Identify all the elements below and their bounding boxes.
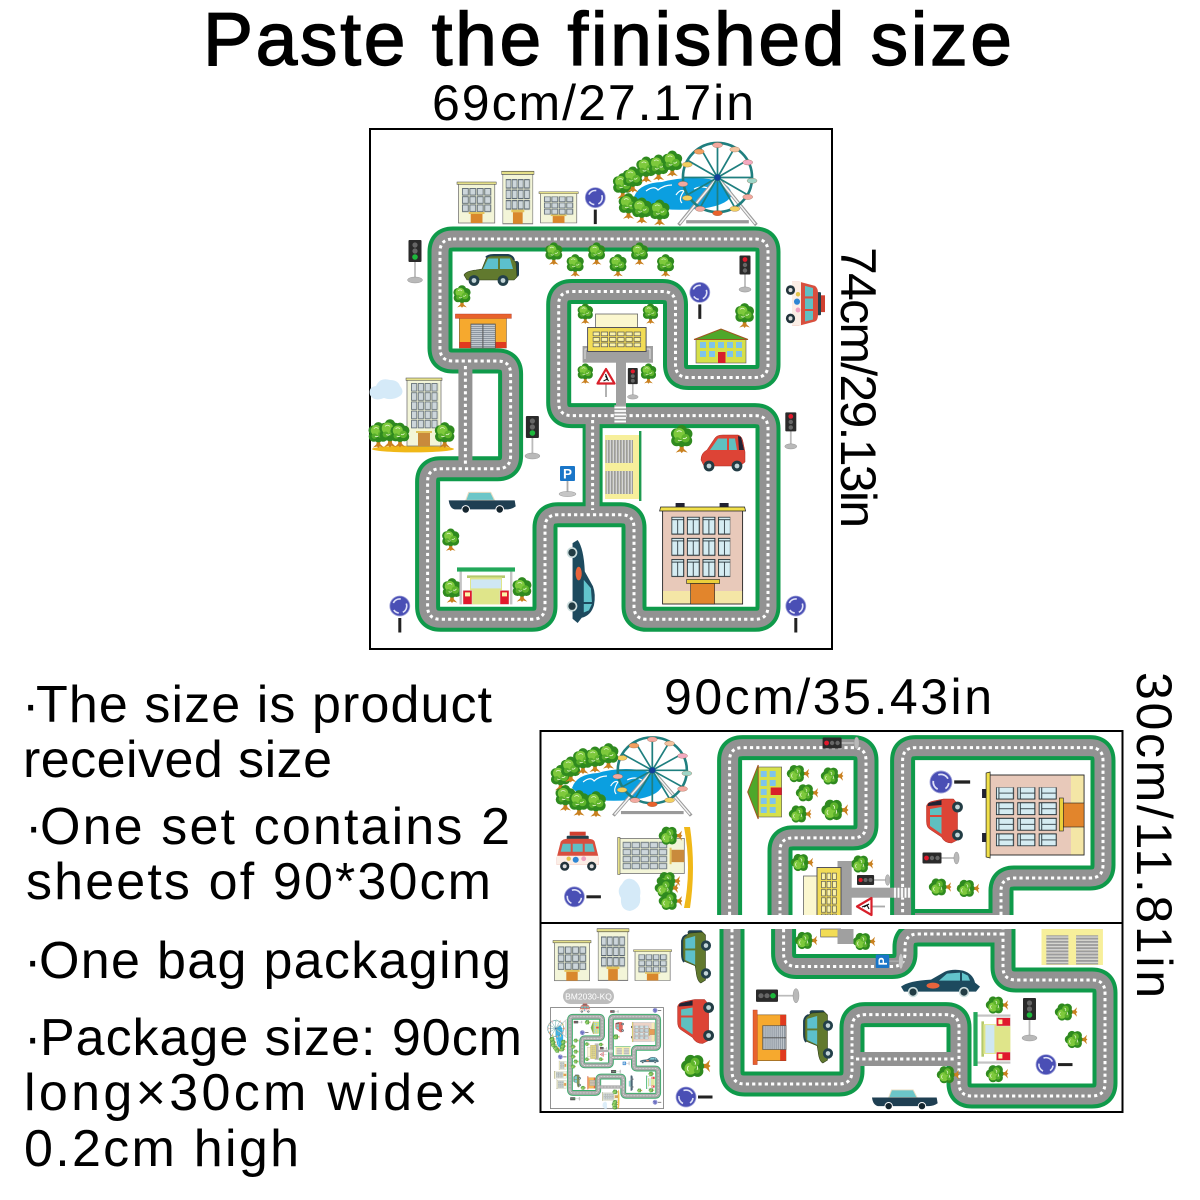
jeep bbox=[464, 255, 519, 286]
three cream buildings bbox=[457, 171, 578, 224]
layout thumbnail bbox=[548, 1004, 664, 1110]
crossing sign bbox=[857, 898, 885, 915]
house bbox=[694, 329, 748, 363]
van bbox=[557, 832, 599, 871]
cloud bbox=[619, 879, 640, 911]
sports car bbox=[901, 970, 980, 996]
note 3: · bbox=[24, 932, 41, 990]
height label: top sheet: 74cm/29.13in bbox=[830, 247, 886, 528]
sideways cars bbox=[678, 930, 833, 1063]
sideways traffic lights bbox=[756, 989, 799, 1003]
trees inside the loop bbox=[442, 242, 754, 603]
traffic lights bbox=[408, 240, 797, 459]
round signs bbox=[564, 771, 970, 907]
dark sedan bbox=[449, 492, 516, 513]
tree cluster by the lake bbox=[613, 150, 682, 225]
cloud bbox=[370, 379, 402, 399]
sideways house bbox=[748, 765, 782, 819]
note 2: · bbox=[25, 798, 42, 856]
center building with plaza bbox=[583, 314, 653, 423]
model code label bbox=[563, 988, 614, 1004]
sideways orange garage bbox=[753, 1010, 786, 1065]
sheet 2 roads bbox=[732, 929, 1105, 1096]
note 3: One bag packaging bbox=[39, 932, 511, 990]
sideways red car bbox=[926, 799, 963, 843]
parking sign bbox=[559, 466, 576, 497]
sideways large building bbox=[982, 772, 1084, 858]
ferris wheel bbox=[678, 143, 757, 225]
note 1: The size is product bbox=[36, 676, 493, 734]
orange garage bbox=[455, 314, 511, 348]
lake bbox=[634, 178, 732, 210]
round signs bbox=[676, 1055, 1072, 1107]
sideways yellow garage, cut at sheet edge bbox=[1042, 929, 1103, 965]
gas station bbox=[457, 567, 515, 604]
traffic lights bbox=[823, 737, 959, 885]
assembled road map artwork bbox=[369, 143, 825, 632]
traffic light bbox=[1022, 998, 1037, 1041]
trees bbox=[681, 932, 1087, 1083]
building edge and plaza at sheet top bbox=[821, 929, 854, 944]
panel: assembled road map bbox=[370, 129, 832, 649]
crossing sign bbox=[598, 369, 614, 397]
panel: sheet 2 bbox=[540, 923, 1122, 1112]
sheet 1 roads bbox=[730, 748, 1103, 915]
tree cluster bbox=[551, 743, 618, 817]
notes text block bbox=[22, 676, 522, 1178]
sideways gas station bbox=[973, 1012, 1010, 1066]
plaza and center building, cut at sheet edge bbox=[803, 861, 910, 915]
red car bbox=[701, 435, 745, 471]
width label: sheets: 90cm/35.43in bbox=[664, 669, 992, 725]
trees bbox=[787, 765, 979, 897]
ferris wheel bbox=[613, 737, 692, 816]
large building bbox=[660, 503, 746, 604]
lake bbox=[572, 769, 662, 801]
note 1: · bbox=[22, 676, 39, 734]
note 2 line 2: sheets of 90*30cm bbox=[26, 853, 491, 911]
round signs bbox=[390, 188, 806, 632]
panel: sheet 1 bbox=[540, 731, 1122, 926]
sideways tall building with trees bbox=[618, 827, 693, 910]
yellow garage bbox=[605, 431, 641, 501]
width label: top sheet: 69cm/27.17in bbox=[432, 75, 754, 131]
note 4: · bbox=[24, 1009, 41, 1067]
vertical sports car bbox=[568, 540, 595, 623]
sideways parking sign bbox=[876, 954, 903, 969]
three cream buildings bbox=[553, 929, 672, 981]
dark sedan bbox=[872, 1090, 938, 1110]
note 4 line 2: long×30cm wide× bbox=[24, 1064, 478, 1122]
note 2: One set contains 2 bbox=[40, 798, 510, 856]
note 1 line 2: received size bbox=[23, 731, 332, 789]
model code label: BM2030-KQ bbox=[565, 992, 612, 1002]
road network bbox=[428, 239, 768, 619]
height label: sheets: 30cm/11.81in bbox=[1126, 672, 1182, 998]
note 4 line 3: 0.2cm high bbox=[24, 1120, 299, 1178]
note 4: Package size: 90cm bbox=[40, 1009, 522, 1067]
van bbox=[786, 282, 825, 326]
tall building with trees bbox=[369, 378, 455, 452]
